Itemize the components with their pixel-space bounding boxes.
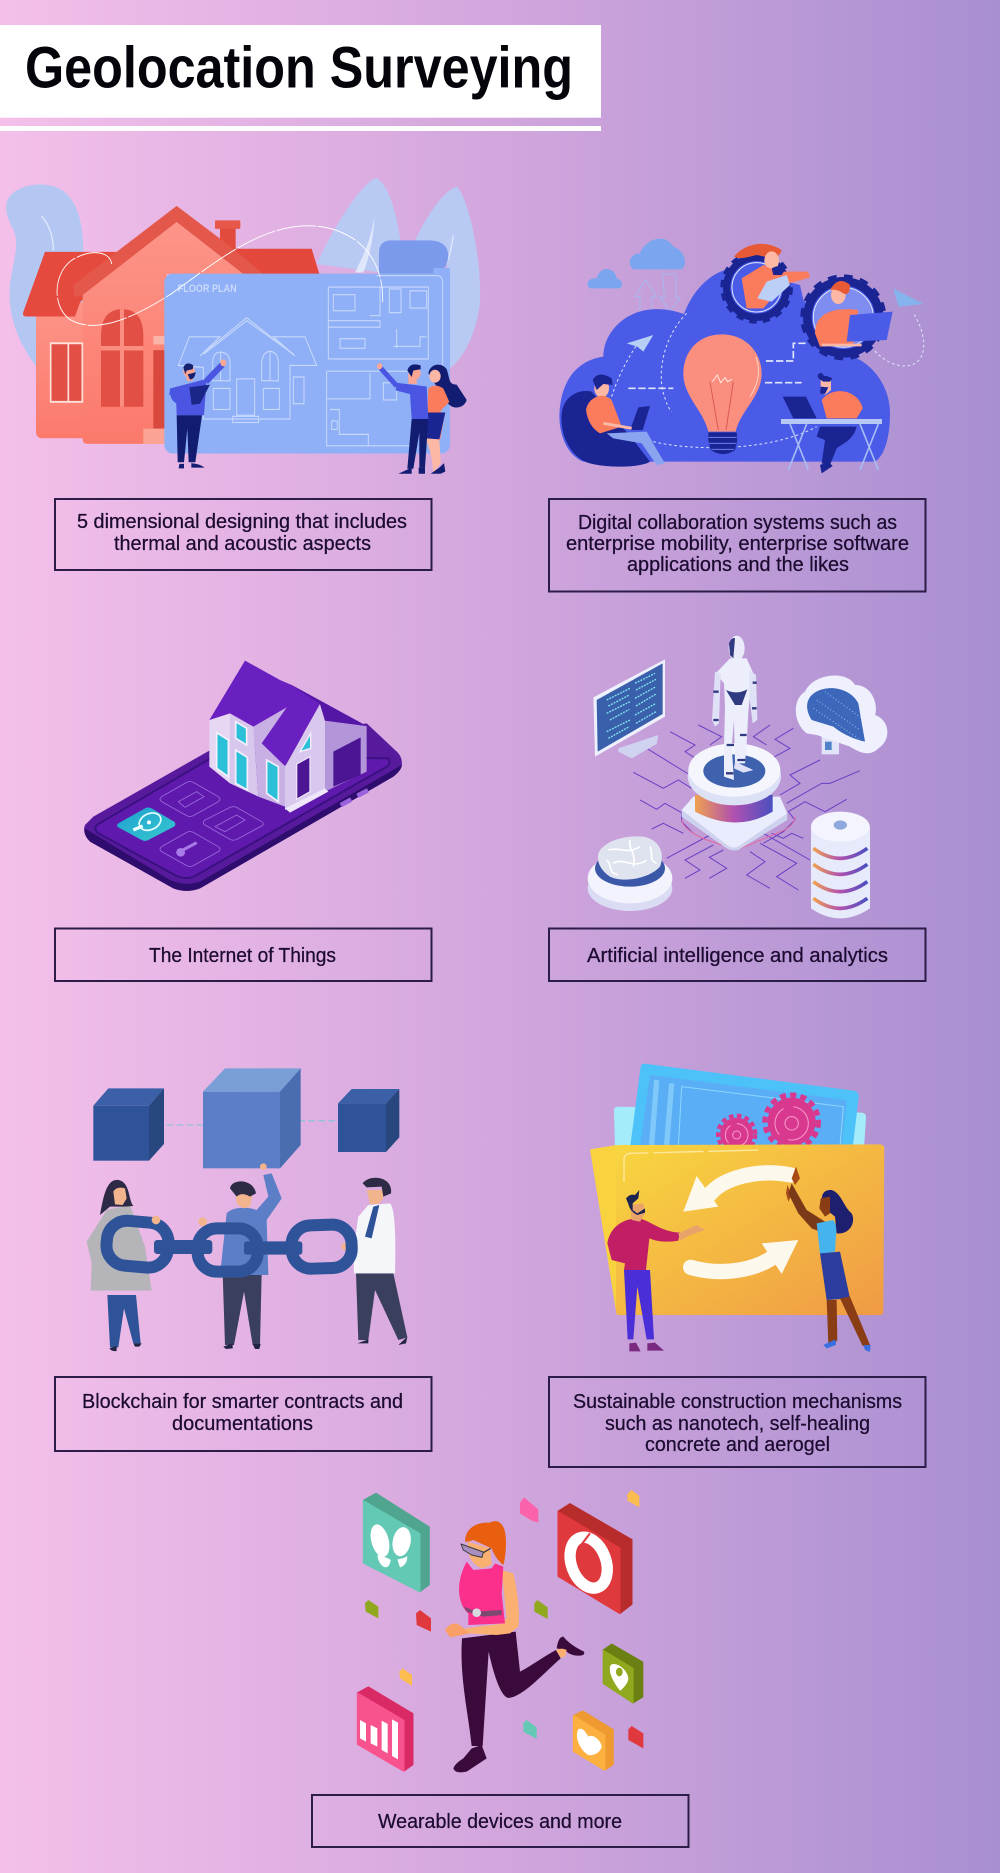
caption box [549, 928, 926, 981]
panel: blockchain [55, 1068, 432, 1451]
caption box: concrete and aerogel [645, 1434, 830, 1456]
panel: digital collaboration [549, 239, 926, 592]
figure: man with raised arm [220, 1163, 282, 1349]
icon: gear with woman [723, 244, 810, 321]
figure: woman [87, 1180, 152, 1351]
caption box [549, 1377, 926, 1467]
title banner [0, 25, 601, 131]
title: Geolocation Surveying [25, 36, 573, 100]
panel: 5D design [6, 178, 480, 570]
icon: heart tile [574, 1712, 613, 1769]
panel: wearable devices [312, 1490, 688, 1847]
icon: isometric house [209, 661, 367, 813]
caption box: Digital collaboration systems such as [578, 512, 897, 534]
caption box: 5 dimensional designing that includes [77, 511, 407, 533]
icon: outlined app tiles [160, 781, 263, 866]
caption box: Blockchain for smarter contracts and [82, 1391, 403, 1413]
figure: person on bean bag [586, 375, 665, 465]
icon: robot [712, 636, 757, 780]
icon: brain [588, 836, 672, 911]
icon: cloud [796, 676, 887, 754]
caption box: enterprise mobility, enterprise software [566, 533, 909, 555]
caption box [549, 499, 926, 592]
illustration: smart home phone [84, 661, 402, 891]
caption box: Artificial intelligence and analytics [587, 945, 888, 967]
illustration: cloud with bulb and people [559, 239, 924, 473]
illustration: AI network [588, 636, 887, 918]
illustration: folder exchange [590, 1064, 884, 1352]
icon: footprints tile [364, 1494, 429, 1591]
caption box: documentations [172, 1413, 313, 1435]
icon: chain links [105, 1219, 352, 1272]
caption box: Wearable devices and more [378, 1811, 622, 1833]
icon: monitor [593, 659, 665, 758]
caption box: The Internet of Things [149, 945, 336, 967]
icon: bulb tile [117, 807, 175, 841]
icon: light bulb [683, 334, 762, 454]
figure: woman raising arms [786, 1167, 871, 1352]
caption box [55, 499, 432, 570]
icon: bar chart tile [358, 1688, 412, 1770]
panel: sustainable construction [549, 1064, 926, 1467]
figure: man with tablet [169, 359, 226, 468]
icon: gear with man and laptop [803, 277, 893, 358]
caption box: applications and the likes [627, 554, 849, 576]
figure: man at desk [781, 373, 882, 473]
caption box [55, 1377, 432, 1451]
icon: block cubes [93, 1068, 399, 1168]
figure: bearded man [607, 1190, 705, 1351]
caption box: thermal and acoustic aspects [114, 533, 371, 555]
panel: internet of things [55, 661, 432, 981]
caption box: such as nanotech, self-healing [605, 1413, 870, 1435]
caption box: Sustainable construction mechanisms [573, 1391, 902, 1413]
illustration: house and floor plan: FLOOR PLAN [178, 283, 237, 295]
caption box [312, 1795, 688, 1847]
chart: circuit lines [633, 725, 860, 890]
figure: couple [377, 363, 467, 474]
icon: gears [718, 1095, 818, 1153]
icon: database [811, 812, 870, 918]
icon: location tile [604, 1645, 642, 1702]
figure: man in shirt and tie [341, 1178, 407, 1345]
icon: folder [590, 1144, 884, 1315]
panel: AI and analytics [549, 636, 926, 981]
illustration: runner and app tiles [358, 1490, 643, 1772]
icon: donut chart tile [559, 1504, 631, 1613]
illustration: house and floor plan [6, 178, 480, 474]
icon: platform [682, 743, 787, 851]
figure: runner [445, 1521, 584, 1772]
icon: confetti squares [365, 1490, 643, 1748]
icon: exchange arrows [683, 1173, 798, 1274]
caption box [55, 928, 432, 981]
illustration: blockchain team [87, 1068, 407, 1351]
